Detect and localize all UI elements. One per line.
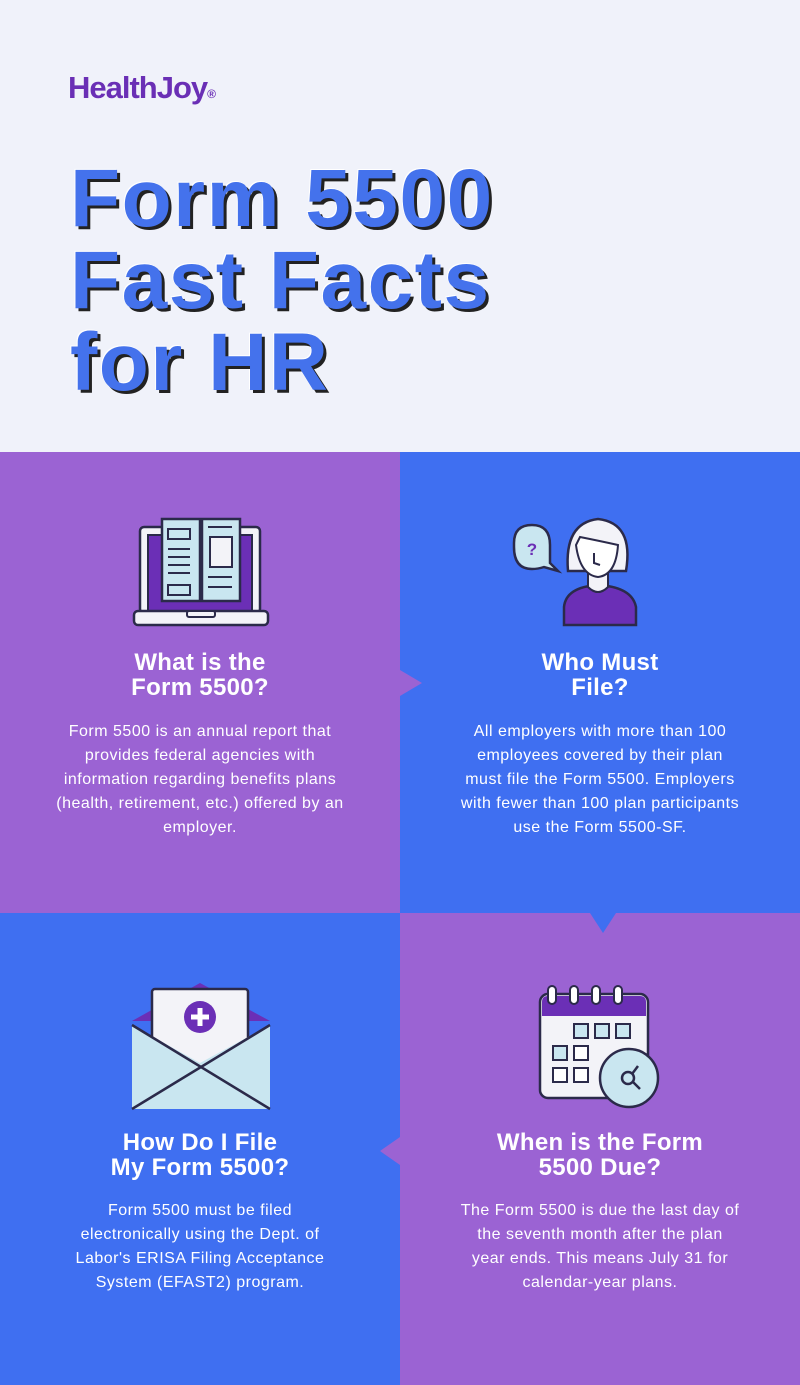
panel: when due — [400, 913, 800, 1385]
text: when due — [461, 1202, 739, 1291]
heading: how do I file: How Do I File — [123, 1129, 277, 1156]
text: when due: The Form 5500 is due the last day of — [461, 1202, 739, 1219]
text: how do I file: electronically using the Dept. of — [81, 1226, 319, 1243]
icon: calendar — [538, 985, 660, 1108]
arrow: right — [400, 670, 422, 696]
text: who must file: All employers with more than 100 — [474, 723, 726, 740]
panel: what is — [0, 452, 400, 913]
icon: envelope — [131, 983, 271, 1110]
text: how do I file: Form 5500 must be filed — [108, 1202, 292, 1219]
text: how do I file: Labor's ERISA Filing Acceptance — [76, 1250, 324, 1267]
arrow: down — [590, 913, 616, 933]
text: who must file: employees covered by their plan — [477, 747, 723, 764]
panel: who must file — [400, 452, 800, 913]
heading: who must file: File? — [571, 674, 629, 701]
text: how do I file: System (EFAST2) program. — [96, 1274, 304, 1291]
logo: HealthJoy® — [68, 70, 215, 105]
text: who must file: with fewer than 100 plan participants — [461, 795, 739, 812]
title — [70, 153, 494, 408]
text: how do I file — [76, 1202, 324, 1291]
heading: when due: 5500 Due? — [539, 1154, 661, 1181]
text: who must file: use the Form 5500-SF. — [513, 819, 687, 836]
heading: how do I file — [111, 1129, 289, 1181]
title: Form 5500 — [70, 153, 494, 244]
heading: what is: Form 5500? — [131, 674, 269, 701]
text: when due: calendar-year plans. — [523, 1274, 677, 1291]
text: when due: the seventh month after the plan — [477, 1226, 723, 1243]
title: Fast Facts — [70, 235, 491, 326]
text: what is: employer. — [163, 819, 237, 836]
heading: how do I file: My Form 5500? — [111, 1154, 289, 1181]
title: for HR — [70, 317, 330, 408]
arrow: left — [380, 1137, 400, 1165]
heading: what is — [131, 649, 269, 701]
text: who must file: must file the Form 5500. Employers — [465, 771, 735, 788]
text: what is — [56, 723, 344, 836]
icon: person question — [512, 518, 638, 626]
heading: what is: What is the — [134, 649, 266, 676]
text: when due: year ends. This means July 31 for — [472, 1250, 728, 1267]
panel: how do I file — [0, 913, 400, 1385]
text: what is: provides federal agencies with — [85, 747, 315, 764]
text: who must file — [460, 723, 739, 836]
text: what is: information regarding benefits plans — [64, 771, 336, 788]
heading: when due: When is the Form — [497, 1129, 703, 1156]
heading: who must file: Who Must — [541, 649, 659, 676]
icon: person question: ? — [527, 540, 537, 559]
text: what is: (health, retirement, etc.) offered by an — [56, 795, 344, 812]
icon: laptop book — [132, 518, 270, 626]
heading: who must file — [541, 649, 659, 701]
text: what is: Form 5500 is an annual report that — [69, 723, 331, 740]
heading: when due — [496, 1129, 703, 1181]
